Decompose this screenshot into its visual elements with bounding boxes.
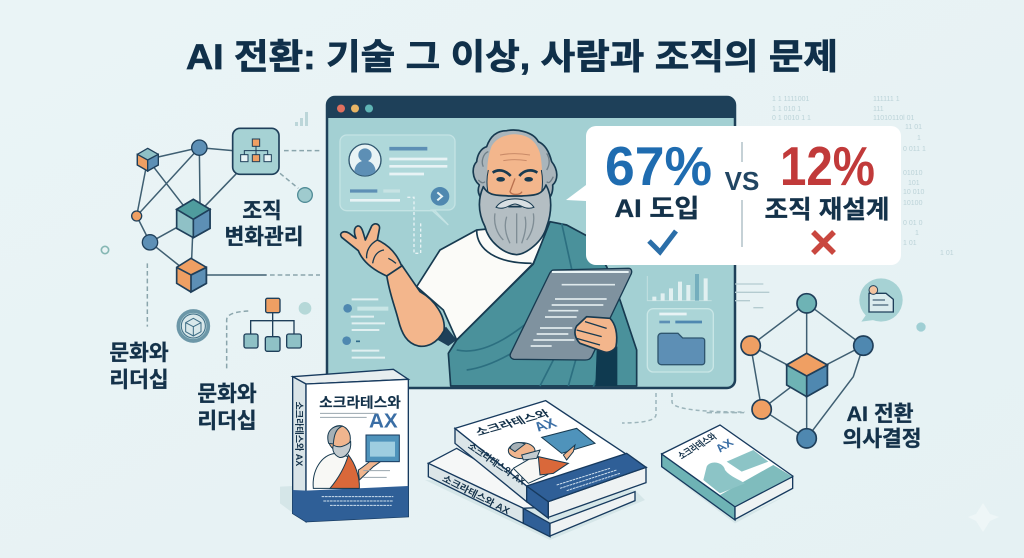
binary digits background: 1 1 010 1 xyxy=(772,106,801,113)
node: teal xyxy=(797,294,816,313)
ears and face xyxy=(487,134,542,207)
right side network diagram xyxy=(707,278,926,448)
binary digits background: 10 010 xyxy=(903,189,925,196)
icon: sparkle xyxy=(968,503,999,532)
book body xyxy=(662,425,793,520)
node: blue xyxy=(797,429,816,448)
icon: orange node xyxy=(132,211,142,221)
icon: org tree xyxy=(244,298,301,351)
upper book: 소크라테스와 xyxy=(472,407,552,438)
binary digits background: 11010110l 01 xyxy=(873,115,914,122)
toga xyxy=(448,222,637,386)
binary digits background: 1 1 1111001 xyxy=(772,96,809,103)
label: 문화와 리더십: 리더십 xyxy=(109,368,169,392)
connectors xyxy=(707,284,863,438)
label: 문화와 리더십 second: 문화와 xyxy=(197,382,257,406)
cover illustration xyxy=(508,428,595,483)
dark underarm xyxy=(435,327,457,346)
right hand xyxy=(575,317,617,352)
cover title: 소크라테스와 xyxy=(319,394,401,410)
vs: VS xyxy=(725,166,759,196)
stack shadow xyxy=(425,480,645,540)
hair xyxy=(473,130,557,200)
stacked books xyxy=(425,401,646,540)
icon: document bubble xyxy=(859,278,903,322)
spine title: 소크라테스와 AX xyxy=(294,402,305,466)
network links xyxy=(137,148,322,368)
folder card xyxy=(647,309,713,372)
book AX: AX xyxy=(712,436,736,455)
label: 조직 변화관리 xyxy=(224,199,304,249)
dashed connectors below window xyxy=(622,393,745,423)
label: AI 전환 의사결정: AI 전환 xyxy=(846,402,914,426)
central cube xyxy=(787,353,827,397)
icon: cross xyxy=(813,232,834,253)
binary digits background: 111 xyxy=(873,106,884,113)
icon: org chart tile xyxy=(233,128,279,174)
divider xyxy=(741,142,743,247)
socrates figure xyxy=(341,130,637,387)
node: orange xyxy=(741,336,760,355)
book shadow xyxy=(280,486,293,513)
binary digits background: 11 01 xyxy=(905,124,922,131)
binary digits background xyxy=(772,96,954,257)
profile card xyxy=(340,135,455,253)
blue band xyxy=(293,486,408,522)
binary digits background: 0 011 1 xyxy=(903,146,926,153)
label: AI 전환 의사결정: 의사결정 xyxy=(842,427,922,451)
left network diagram xyxy=(101,128,322,368)
icon: gear with cube xyxy=(178,311,208,341)
cover small lines xyxy=(320,413,390,477)
label: 조직 변화관리: 조직 xyxy=(242,199,282,223)
cover socrates xyxy=(313,426,385,488)
binary digits background: 1 01 xyxy=(903,240,917,247)
binary digits background: 01010 xyxy=(903,170,923,177)
flat teal book xyxy=(662,425,793,523)
binary digits background: 0 01 0 xyxy=(903,220,923,227)
teal band xyxy=(720,465,792,506)
window buttons xyxy=(337,104,373,112)
book title: 소크라테스와 xyxy=(675,431,720,461)
mini bar chart xyxy=(647,274,712,301)
stat: 67%: 67% xyxy=(605,135,712,197)
band lines xyxy=(322,497,393,505)
upper book xyxy=(455,401,646,518)
callout panel xyxy=(566,126,901,265)
upright book xyxy=(280,369,408,522)
icon: large teal cube xyxy=(177,199,210,238)
node: blue xyxy=(854,336,873,355)
icon: teal dot xyxy=(298,188,312,202)
binary digits background: 1 xyxy=(917,135,921,142)
binary digits background: 111111 1 xyxy=(873,96,900,103)
binary digits background: 1 xyxy=(915,230,919,237)
tunic xyxy=(417,223,550,340)
book body xyxy=(293,369,408,522)
icon: teal dot xyxy=(916,322,926,332)
icon: blue node xyxy=(142,235,158,250)
binary digits background: 0 1 0010 1 1 xyxy=(772,115,811,122)
icon: ring xyxy=(101,246,109,254)
lower book: 소크라테스와 AX xyxy=(441,473,512,517)
title: AI 전환: 기술 그 이상, 사람과 조직의 문제 xyxy=(186,38,838,77)
icon: teal dot xyxy=(299,302,311,315)
window title bar xyxy=(327,97,735,118)
browser window xyxy=(327,97,735,388)
upper book: AX xyxy=(531,416,561,435)
cover monitor xyxy=(366,435,399,462)
cover AX: AX xyxy=(369,409,398,432)
tablet xyxy=(510,268,632,360)
label: AI 도입: AI 도입 xyxy=(614,195,700,223)
upper book: 소크라테스와 AX xyxy=(466,440,528,488)
silhouette xyxy=(703,450,768,493)
book shadow xyxy=(662,468,793,523)
arm xyxy=(387,265,444,346)
binary digits background: 1 01 xyxy=(940,250,954,257)
label: 문화와 리더십: 문화와 xyxy=(109,341,169,365)
label: 문화와 리더십 second: 리더십 xyxy=(197,409,257,433)
icon: check xyxy=(649,231,676,252)
label: 문화와 리더십 second xyxy=(197,382,257,433)
callout: statistics comparison xyxy=(566,126,901,265)
beard xyxy=(479,185,551,255)
label: 문화와 리더십 xyxy=(109,341,169,392)
icon: orange cube xyxy=(177,258,206,292)
binary digits background: 101 xyxy=(908,180,920,187)
label: AI 전환 의사결정 xyxy=(842,402,922,451)
forehead lines and brows xyxy=(500,154,530,161)
lower book xyxy=(428,448,635,537)
icon: small cube xyxy=(137,148,158,171)
label: 조직 변화관리: 변화관리 xyxy=(224,225,304,249)
left text list xyxy=(342,299,388,358)
binary digits background: 10100 xyxy=(903,200,923,207)
node: orange xyxy=(752,400,771,419)
raised hand xyxy=(341,224,402,276)
icon: blue node xyxy=(192,140,207,155)
label: 조직 재설계: 조직 재설계 xyxy=(764,196,890,224)
small bars icon xyxy=(295,112,308,126)
stat: 12%: 12% xyxy=(780,135,875,197)
